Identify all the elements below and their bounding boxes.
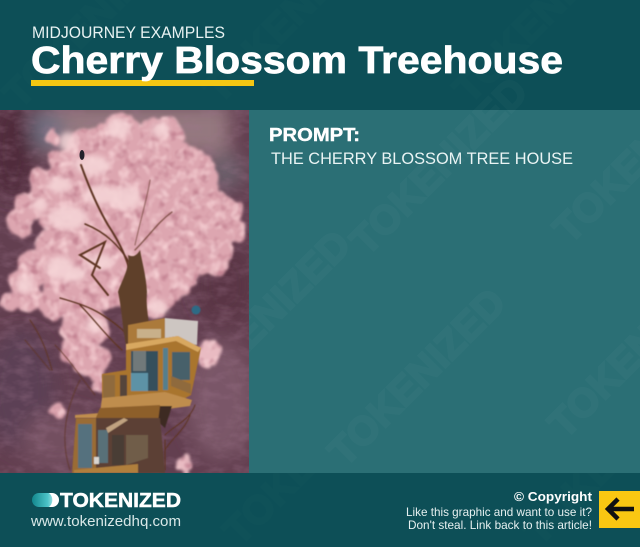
copyright heading: © Copyright: [514, 489, 593, 504]
panel watermark: TOKENIZED: [342, 69, 536, 263]
panel watermark: TOKENIZED: [320, 280, 514, 474]
website url: www.tokenizedhq.com: [30, 514, 181, 530]
panel text: prompt: [269, 125, 573, 168]
logo wordmark: TOKENIZED: [60, 490, 181, 512]
yellow underline: [31, 80, 254, 86]
prompt text: THE CHERRY BLOSSOM TREE HOUSE: [271, 149, 573, 168]
logo icon: [32, 493, 59, 507]
balcony: [75, 392, 192, 418]
copyright block: [406, 489, 593, 532]
illustration: cherry blossom treehouse: [0, 100, 255, 473]
panel: prompt background: [249, 110, 640, 473]
panel watermark: [165, 57, 640, 474]
copyright line one: Like this graphic and want to use it?: [406, 505, 592, 519]
eyebrow heading: MIDJOURNEY EXAMPLES: [32, 23, 225, 42]
main title: Cherry Blossom Treehouse: [31, 40, 563, 82]
blossom highlights: [16, 118, 169, 333]
title block: [31, 23, 563, 86]
icon: yellow arrow box: [599, 491, 640, 528]
blossom crown: [0, 114, 246, 417]
panel watermark: TOKENIZED: [165, 222, 359, 416]
bird: [80, 150, 84, 160]
branches: [25, 165, 195, 470]
background texture: [0, 110, 249, 473]
windows: [131, 351, 158, 391]
copyright line two: Don't steal. Link back to this article!: [408, 518, 592, 532]
lower cabin: [72, 418, 165, 473]
painting background: [0, 110, 249, 473]
roof terrace: [165, 318, 198, 345]
right side blossoms: [176, 340, 224, 472]
prompt label: PROMPT:: [269, 125, 360, 145]
trunk: [118, 250, 150, 345]
footer logo block: [30, 490, 181, 530]
upper cabin: [75, 306, 201, 428]
cabin body: [102, 336, 201, 405]
